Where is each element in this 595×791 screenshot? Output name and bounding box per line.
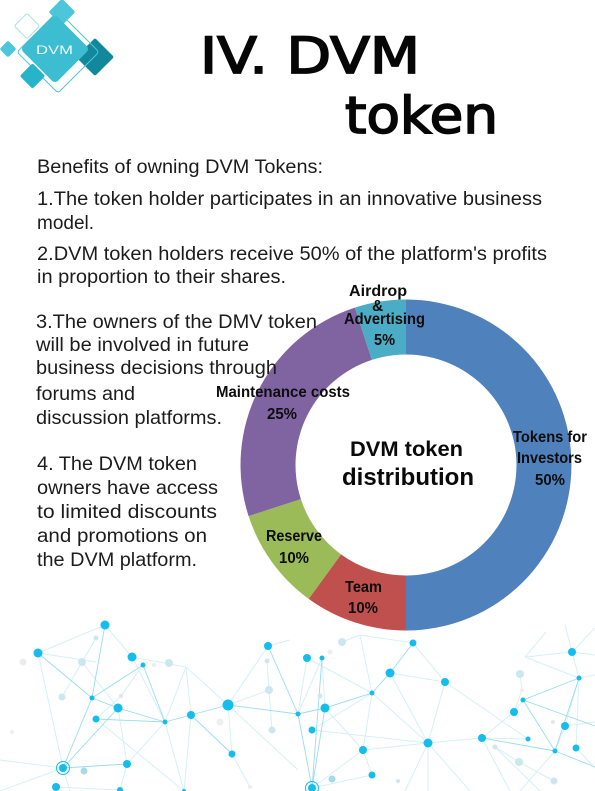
chart center title: distribution xyxy=(342,464,474,491)
donut chart: DVM token distribution xyxy=(216,283,587,631)
network bright nodes xyxy=(34,620,582,791)
text: benefit 4: 4. The DVM token xyxy=(37,454,197,475)
text: benefit 3 xyxy=(35,312,317,429)
text: benefit 4: owners have access xyxy=(37,478,218,499)
text: benefit 3: will be involved in future xyxy=(35,335,249,356)
segment: maintenance costs 25% xyxy=(241,308,372,516)
label: tokens for investors: Tokens for xyxy=(513,429,587,446)
text: benefit 3: business decisions through xyxy=(36,358,277,379)
text: benefit 4 xyxy=(37,454,218,571)
segment: airdrop and advertising 5% xyxy=(355,300,406,360)
text: benefit 2: in proportion to their shares. xyxy=(37,267,286,288)
label: airdrop and advertising xyxy=(344,283,425,349)
text: benefits heading: Benefits of owning DVM Tokens: xyxy=(37,157,323,178)
label: team: Team xyxy=(345,579,382,596)
label: reserve: Reserve xyxy=(266,528,322,545)
label: airdrop and advertising: Airdrop xyxy=(349,283,407,300)
text: benefit 1 xyxy=(37,189,542,234)
logo: DVM: DVM xyxy=(36,43,73,57)
segment: tokens for investors 50% xyxy=(406,300,571,630)
text: benefit 1: 1.The token holder participates in an innovative business xyxy=(37,189,542,210)
label: reserve: 10% xyxy=(279,550,309,567)
chart center title xyxy=(342,438,474,491)
network background xyxy=(0,625,595,791)
text: benefit 3: 3.The owners of the DMV token xyxy=(36,312,317,333)
label: tokens for investors: 50% xyxy=(535,472,565,489)
text: benefit 2: 2.DVM token holders receive 50% of the platform's profits xyxy=(37,244,547,265)
label: reserve xyxy=(266,528,322,567)
text: benefit 4: and promotions on xyxy=(37,526,207,547)
text: benefit 4: the DVM platform. xyxy=(37,550,197,571)
text: benefit 4: to limited discounts xyxy=(37,502,217,523)
chart center title: DVM token xyxy=(350,438,463,461)
label: tokens for investors: Investors xyxy=(517,450,582,467)
label: team: 10% xyxy=(348,600,378,617)
title: token xyxy=(345,87,498,146)
label: team xyxy=(345,579,382,617)
text: benefit 3: forums and xyxy=(36,384,135,405)
segment: reserve 10% xyxy=(249,499,341,599)
title xyxy=(200,27,498,146)
title: IV. DVM xyxy=(200,27,420,85)
label: maintenance costs xyxy=(216,384,350,423)
label: airdrop and advertising: Advertising xyxy=(344,311,425,328)
label: maintenance costs: Maintenance costs xyxy=(216,384,350,401)
segment: team 10% xyxy=(309,554,406,631)
network pale nodes xyxy=(10,636,558,789)
text: benefit 2 xyxy=(37,244,547,288)
logo: DVM xyxy=(0,0,114,93)
label: maintenance costs: 25% xyxy=(267,406,297,423)
text: benefit 3: discussion platforms. xyxy=(36,408,222,429)
label: tokens for investors xyxy=(513,429,587,489)
label: airdrop and advertising: & xyxy=(372,298,383,315)
text: benefit 1: model. xyxy=(37,213,94,234)
label: airdrop and advertising: 5% xyxy=(374,332,395,349)
